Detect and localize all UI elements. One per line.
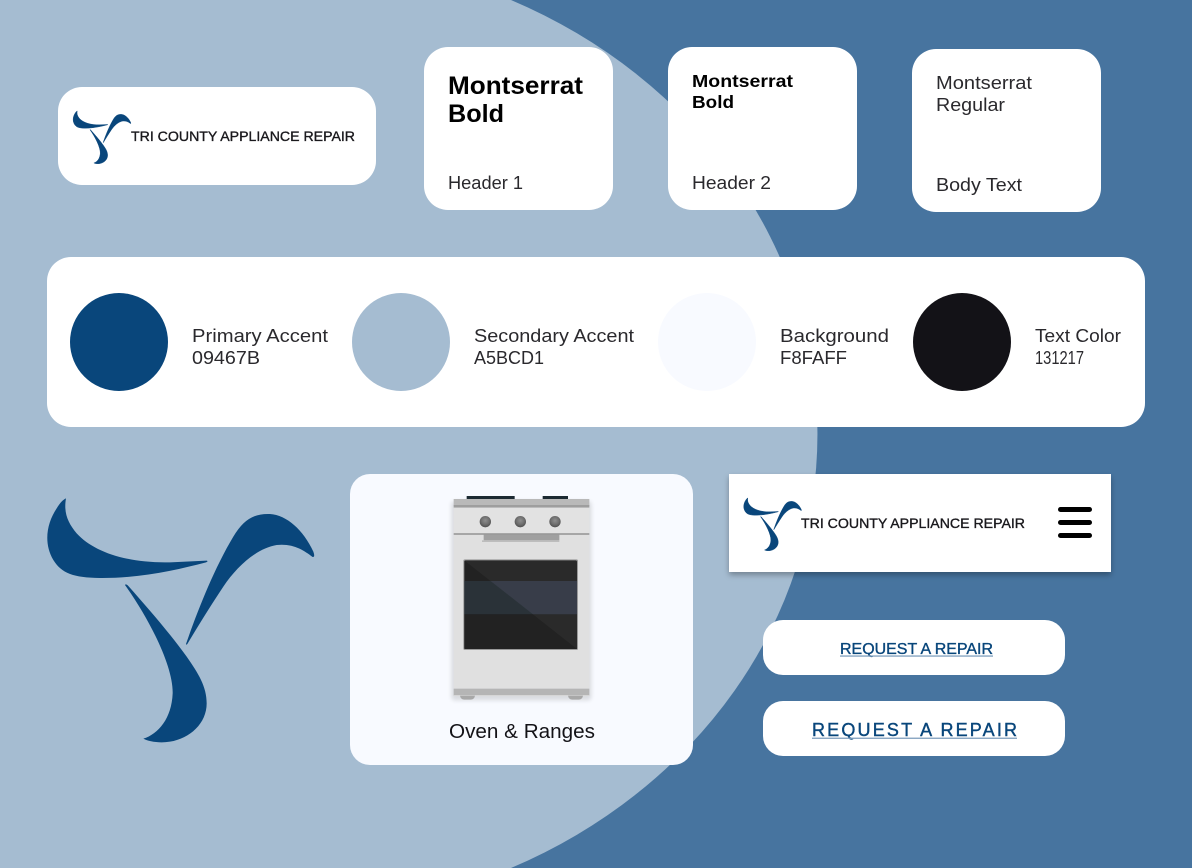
button: large request a repair: REQUEST A REPAIR	[812, 720, 1017, 740]
body label: Body Text	[936, 175, 1022, 195]
card: body text	[912, 49, 1101, 212]
nav logo text: TRI COUNTY APPLIANCE REPAIR	[801, 515, 1025, 531]
card: header 2	[668, 47, 857, 210]
background: light blue ellipse	[0, 0, 817, 868]
label: background: Background	[780, 326, 889, 346]
button: large request a repair	[763, 701, 1065, 756]
icon: hamburger menu	[1058, 507, 1092, 538]
logo mark small	[73, 111, 131, 164]
product label: Oven & Ranges	[449, 721, 595, 743]
logo mark large	[47, 498, 314, 742]
body sample	[936, 73, 1032, 115]
logo text: TRI COUNTY APPLIANCE REPAIR	[131, 128, 355, 144]
swatch: secondary accent	[352, 293, 450, 391]
swatch: text colour	[913, 293, 1011, 391]
card: product oven and ranges	[350, 474, 693, 765]
navigation bar	[729, 474, 1111, 572]
panel: colour palette	[47, 257, 1145, 427]
icon: oven	[451, 496, 591, 700]
header 1 sample: Montserrat	[448, 72, 584, 100]
label: text colour	[1035, 326, 1121, 368]
header 1 label: Header 1	[448, 173, 523, 193]
logo card	[58, 87, 376, 185]
label: background	[780, 326, 889, 368]
label: text colour: Text Color	[1035, 326, 1121, 346]
swatch: background	[658, 293, 756, 391]
label: secondary accent: A5BCD1	[474, 348, 544, 368]
header 2 sample: Bold	[692, 92, 734, 112]
label: secondary accent	[474, 326, 634, 368]
label: primary accent: 09467B	[192, 348, 260, 368]
body sample: Montserrat	[936, 73, 1032, 93]
button: small request a repair	[763, 620, 1065, 675]
swatch: primary accent	[70, 293, 168, 391]
nav logo mark	[744, 498, 801, 551]
header 2 label: Header 2	[692, 173, 771, 193]
header 2 sample	[692, 71, 793, 112]
card: header 1	[424, 47, 613, 210]
header 1 sample	[448, 72, 584, 128]
label: background: F8FAFF	[780, 348, 847, 368]
header 1 sample: Bold	[448, 100, 504, 128]
button: small request a repair: REQUEST A REPAIR	[840, 641, 993, 658]
header 2 sample: Montserrat	[692, 71, 793, 91]
body sample: Regular	[936, 95, 1005, 115]
label: primary accent	[192, 326, 328, 368]
label: primary accent: Primary Accent	[192, 326, 328, 346]
label: secondary accent: Secondary Accent	[474, 326, 634, 346]
label: text colour: 131217	[1035, 348, 1084, 368]
